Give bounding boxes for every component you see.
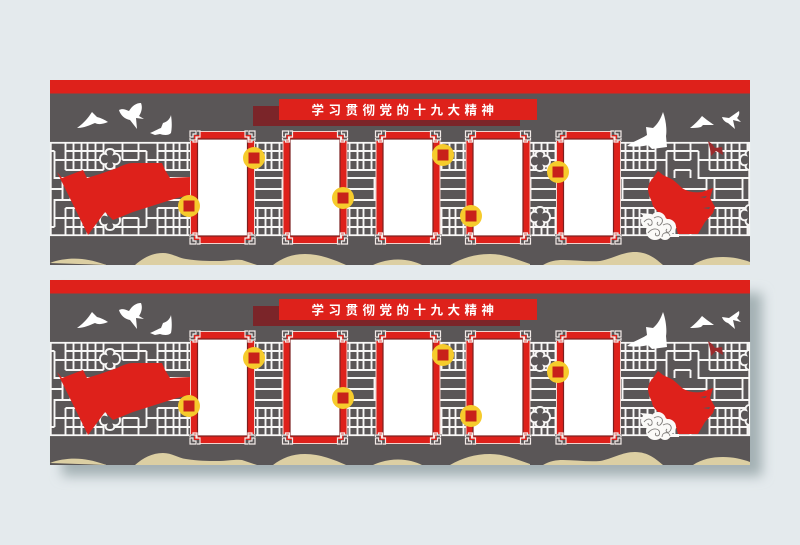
frame 4 (464, 330, 532, 445)
heading plate (253, 99, 537, 126)
wall base (50, 80, 750, 265)
sand hills (50, 452, 750, 465)
frame 3 (374, 330, 442, 445)
panel: lower wall design (50, 280, 760, 465)
lattice ornaments (100, 349, 760, 430)
icon: red flag left (57, 363, 190, 435)
icon: birds right (627, 311, 741, 349)
heading plate (253, 299, 537, 326)
coin 1 (243, 147, 265, 169)
icon: birds right (627, 111, 741, 149)
coin 6 (547, 161, 569, 183)
frame 2 (282, 130, 348, 245)
coin 4 (432, 344, 454, 366)
panel: upper wall design (50, 80, 760, 265)
frame 1 (189, 330, 256, 445)
heading: 学习贯彻党的十九大精神 (311, 102, 499, 118)
coin 3 (332, 187, 354, 209)
icon: cloud (640, 212, 679, 240)
frame 1 (189, 130, 256, 245)
coin 3 (332, 387, 354, 409)
icon: red flag right (648, 141, 723, 234)
frame 2 (282, 330, 348, 445)
coin 5 (460, 205, 482, 227)
frame 3 (374, 130, 442, 245)
frame 4 (464, 130, 532, 245)
heading: 学习贯彻党的十九大精神 (311, 302, 499, 318)
coin 1 (243, 347, 265, 369)
coin 2 (178, 195, 200, 217)
coin 5 (460, 405, 482, 427)
icon: cloud (640, 412, 679, 440)
lattice band (51, 343, 749, 435)
drop shadow of lower panel (62, 293, 762, 476)
sand hills (50, 252, 750, 265)
frame 5 (555, 130, 622, 245)
icon: birds left (77, 103, 172, 135)
coin 4 (432, 144, 454, 166)
icon: red flag right (648, 341, 723, 434)
frame 5 (555, 330, 622, 445)
coin 2 (178, 395, 200, 417)
top red bar (50, 80, 750, 94)
lattice ornaments (100, 149, 760, 230)
lattice band (51, 143, 749, 235)
coin 6 (547, 361, 569, 383)
top red bar (50, 280, 750, 294)
icon: red flag left (57, 163, 190, 235)
wall base (50, 280, 750, 465)
icon: birds left (77, 303, 172, 335)
